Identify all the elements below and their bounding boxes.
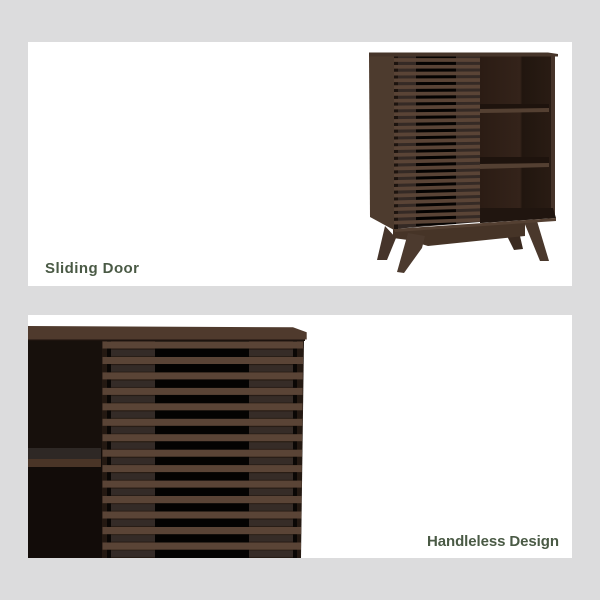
compartment shelf front (28, 459, 101, 467)
back leg right (507, 236, 523, 250)
shelf 2 (478, 157, 549, 169)
panel: sliding door (28, 42, 572, 286)
compartment back panel (28, 340, 103, 448)
door slats (394, 60, 480, 223)
open shelving interior (480, 56, 553, 223)
leg front left (397, 233, 425, 273)
door see-through gap (416, 55, 456, 226)
cabinet top (369, 52, 558, 56)
apron (393, 221, 525, 246)
photo: close-up of slatted door (28, 326, 307, 558)
door slats (102, 342, 303, 550)
sliding door backing (394, 55, 480, 229)
compartment shelf top (28, 448, 101, 459)
door gaps (102, 340, 304, 558)
leg rear left (377, 226, 396, 260)
open compartment (28, 448, 102, 558)
cabinet top board (28, 326, 307, 340)
shelf 1 (480, 104, 549, 113)
label: handleless design: Handleless Design (427, 533, 559, 550)
bottom ledge (394, 208, 556, 232)
left side panel (369, 55, 394, 230)
panel: handleless design (28, 315, 572, 558)
leg front right (524, 221, 549, 261)
photo: slatted cabinet with legs (369, 52, 558, 273)
door left shadow (394, 55, 398, 229)
right side edge (551, 55, 555, 218)
top board underside shadow (28, 340, 305, 341)
label: sliding door: Sliding Door (45, 260, 139, 277)
